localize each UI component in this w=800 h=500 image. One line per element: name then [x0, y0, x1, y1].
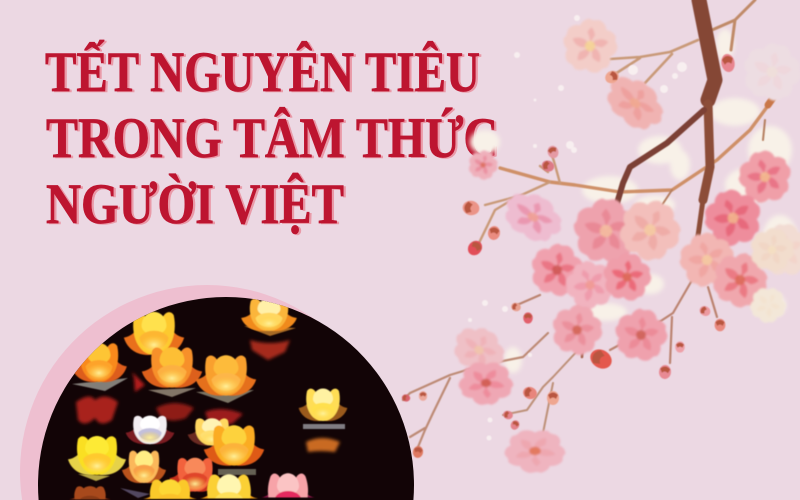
cream background petals — [470, 29, 798, 373]
blossom cluster peach — [604, 187, 694, 276]
lantern 11 red — [169, 458, 221, 492]
lantern 5 — [196, 355, 256, 396]
lower left twigs — [478, 155, 560, 245]
blossom deep pink right — [732, 146, 798, 210]
lantern 1 — [241, 298, 297, 331]
left fork — [615, 110, 704, 210]
blossom lower — [543, 299, 610, 364]
blossom — [522, 237, 592, 305]
blossom pale top right — [733, 36, 800, 111]
blossom large peach — [673, 228, 742, 295]
buds — [401, 53, 736, 459]
blossom — [700, 243, 779, 320]
cherry blossom branch — [401, 0, 800, 473]
blossom top peach — [555, 14, 624, 81]
lower twigs — [403, 333, 548, 447]
lantern 14 — [143, 480, 197, 499]
lantern 15 pink — [261, 473, 315, 497]
lantern 9 — [122, 450, 166, 483]
lantern 13 — [200, 474, 258, 498]
blossom cream lower — [741, 279, 794, 332]
lantern leaf plates — [72, 326, 345, 498]
blossom cluster centre — [567, 196, 644, 270]
lantern 2 — [124, 312, 184, 355]
title: TRONG TÂM THỨC — [46, 107, 498, 170]
blossom lilac — [492, 181, 573, 255]
title: TRONG TÂM THỨC — [48, 108, 500, 171]
long light twig — [500, 73, 790, 192]
blossom pale lower left — [442, 317, 515, 385]
lantern 3 — [71, 343, 127, 382]
blossom — [596, 249, 657, 308]
blossom lower left — [456, 359, 516, 405]
blossom — [557, 253, 624, 319]
lantern 16 dim — [69, 486, 111, 499]
lantern 6 — [299, 388, 347, 421]
falling white specks — [468, 15, 687, 440]
title — [45, 40, 500, 237]
blossoms — [442, 14, 800, 473]
lower trunk — [703, 104, 710, 200]
lantern 4 — [142, 347, 202, 388]
water reflections — [76, 340, 340, 452]
lantern 12 — [204, 425, 264, 466]
title: NGƯỜI VIỆT — [46, 173, 344, 236]
lantern photo circle — [38, 296, 414, 500]
lantern 8 yellow — [68, 436, 126, 475]
blossom hanging bottom — [502, 427, 568, 473]
blossom under twig — [593, 64, 676, 144]
blossom cream right — [756, 224, 800, 279]
blossom lower — [608, 304, 674, 368]
blossom by title — [462, 146, 503, 186]
lantern 10 pale — [188, 418, 236, 446]
title: NGƯỜI VIỆT — [48, 174, 346, 237]
title: TẾT NGUYÊN TIÊU — [45, 40, 480, 104]
blossom right mid — [696, 183, 771, 256]
trunk — [699, 0, 715, 100]
pink crescent behind photo — [20, 285, 394, 500]
trunk and branches — [403, 0, 790, 447]
floating lotus lanterns — [68, 298, 347, 499]
blossom cream — [742, 223, 800, 280]
upper right twig — [712, 0, 755, 50]
title: TẾT NGUYÊN TIÊU — [47, 41, 482, 105]
lantern 7 white — [126, 416, 174, 444]
left upper twigs — [610, 40, 698, 83]
